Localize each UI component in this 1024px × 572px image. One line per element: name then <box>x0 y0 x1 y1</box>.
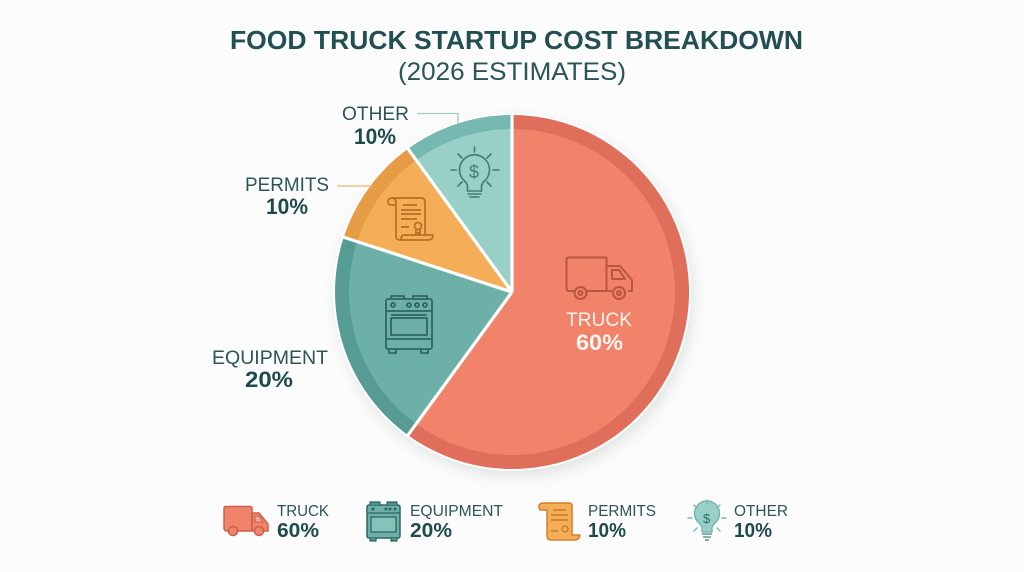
label: equipment: EQUIPMENT <box>212 348 328 369</box>
legend item: other: 10% <box>734 520 772 542</box>
slice: other 10% <box>408 115 512 292</box>
legend item: truck <box>224 503 329 542</box>
title <box>230 25 803 86</box>
legend <box>224 500 788 542</box>
label: equipment: 20% <box>245 367 293 392</box>
leader line: permits <box>337 185 372 187</box>
legend item: equipment: EQUIPMENT <box>410 503 503 520</box>
legend item: other <box>688 500 788 542</box>
pie chart <box>333 113 692 475</box>
label: other: OTHER <box>342 104 409 125</box>
slice: truck 60% <box>408 115 689 469</box>
label: equipment <box>212 348 328 392</box>
icon: idea bulb in pie <box>451 147 499 197</box>
label: other: 10% <box>354 124 396 149</box>
label: truck: TRUCK <box>566 310 632 331</box>
label: other <box>342 104 409 149</box>
leader line: other <box>417 114 458 124</box>
title: (2026 ESTIMATES) <box>398 58 626 86</box>
slice: permits 10% <box>344 149 512 292</box>
legend item: truck: TRUCK <box>277 503 329 520</box>
slice: equipment 20% <box>335 237 512 435</box>
legend item: truck: 60% <box>277 520 319 542</box>
legend item: equipment <box>367 502 503 542</box>
title: FOOD TRUCK STARTUP COST BREAKDOWN <box>230 25 803 55</box>
legend item: other: OTHER <box>734 503 788 520</box>
label: truck <box>566 310 632 355</box>
label: permits <box>245 175 329 219</box>
label: permits: PERMITS <box>245 175 329 196</box>
icon: permit scroll in pie <box>388 198 433 240</box>
icon: idea bulb in pie: $ <box>469 162 479 182</box>
legend item: permits <box>539 503 656 542</box>
icon: truck in pie <box>566 258 632 299</box>
legend item: permits: PERMITS <box>588 503 656 520</box>
legend item: other: $ <box>703 511 711 526</box>
label: truck: 60% <box>576 330 623 355</box>
label: permits: 10% <box>266 194 308 219</box>
icon: oven in pie <box>386 296 432 353</box>
legend item: permits: 10% <box>588 520 626 542</box>
legend item: equipment: 20% <box>410 520 452 542</box>
